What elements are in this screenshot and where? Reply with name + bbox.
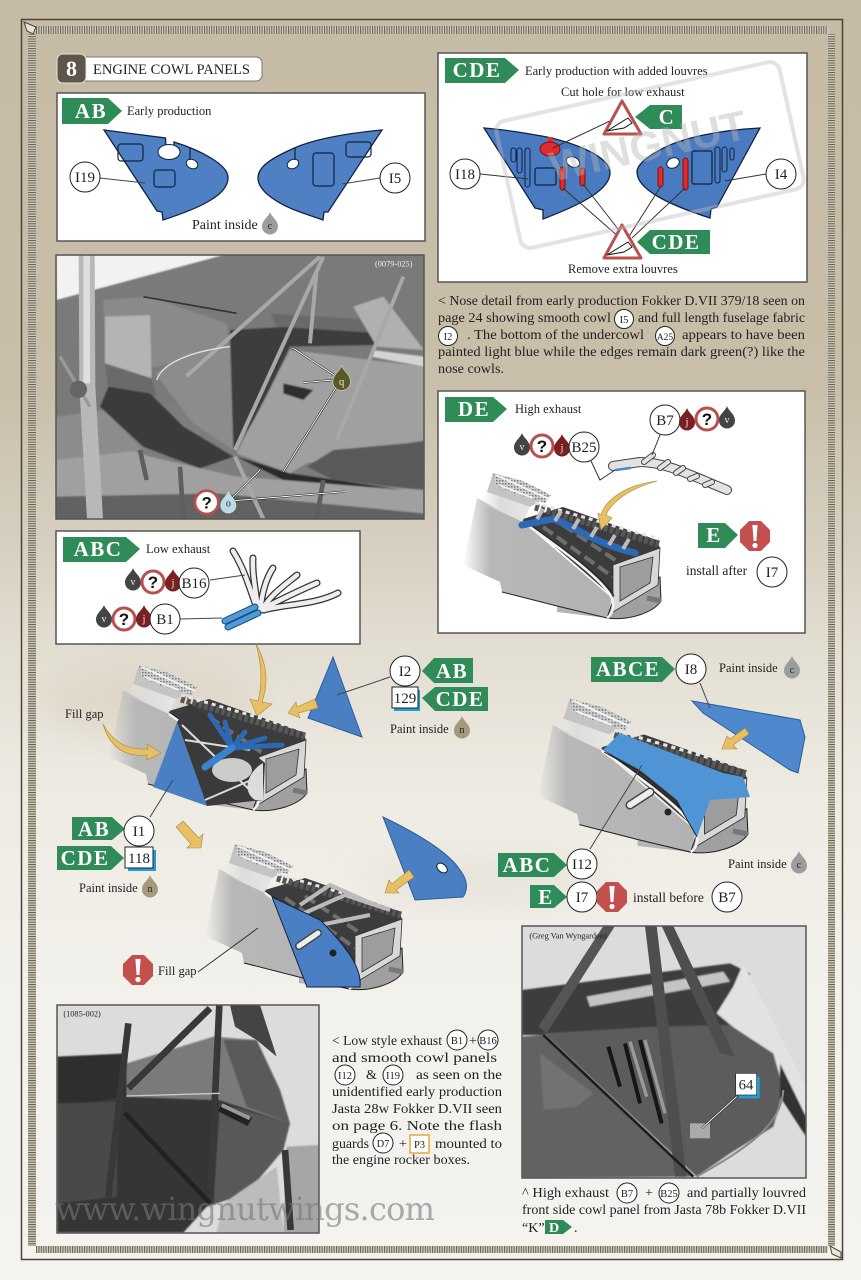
label: B7 with paints: v xyxy=(724,415,730,426)
label: I18 xyxy=(450,159,480,189)
text: high exhaust caption: + xyxy=(645,1186,653,1201)
text: low style exhaust caption: Jasta 28w Fokker D.VII seen xyxy=(332,1102,502,1117)
label: I19 xyxy=(70,162,100,192)
label: 129 part box: 129 xyxy=(394,691,416,707)
arrow: fill gap xyxy=(103,724,161,760)
label: I2: I2 xyxy=(399,664,411,680)
text: high exhaust caption: ^ High exhaust xyxy=(522,1186,609,1201)
text: low style exhaust caption: < Low style exhaust xyxy=(332,1034,442,1049)
text: low style exhaust caption: mounted to xyxy=(435,1137,502,1152)
tag: AB xyxy=(62,98,122,124)
part: front side panel xyxy=(383,817,466,900)
photo: nose detail xyxy=(56,256,424,518)
tag: AB for I1 xyxy=(72,817,125,841)
watermark stamp xyxy=(494,60,806,250)
panel: DE high exhaust xyxy=(438,391,805,633)
note: paint inside n xyxy=(390,716,470,738)
label: B25 with paints: j xyxy=(560,443,563,454)
callout: unknown and o colour xyxy=(195,470,345,514)
tag: AB left: AB xyxy=(436,659,468,683)
heading: section 8 engine cowl panels xyxy=(57,54,262,83)
text: nose detail caption: I2 xyxy=(444,332,452,343)
text: low style exhaust caption: the engine rocker boxes. xyxy=(332,1153,470,1168)
note: install after I7: I7 xyxy=(766,565,779,581)
label: B25 with paints: v xyxy=(520,442,524,453)
tag: AB for I1: AB xyxy=(78,817,110,841)
label: B7 with paints: j xyxy=(685,417,688,428)
text: low style exhaust caption: on page 6. Note the flash xyxy=(332,1119,502,1134)
text: low style exhaust caption: I12 xyxy=(338,1071,352,1082)
tag: ABC: ABC xyxy=(74,537,122,561)
tag: E: E xyxy=(706,523,722,547)
tag: E xyxy=(698,523,738,548)
watermark stamp: WINGNUT xyxy=(545,101,751,190)
note: paint inside c xyxy=(192,212,278,234)
text: nose detail caption: painted light blue while the edges remain dark green(?) like the xyxy=(438,345,805,360)
label: B16 with paints xyxy=(125,568,209,598)
note: paint inside n: n xyxy=(460,725,464,736)
text: low style exhaust caption: I19 xyxy=(386,1071,400,1082)
label: I12: I12 xyxy=(572,857,592,873)
label: B16 with paints: j xyxy=(171,578,174,589)
note: paint inside c right xyxy=(719,656,800,678)
label: I5: I5 xyxy=(389,171,401,187)
photo credit: (Greg Van Wyngarden) xyxy=(529,931,607,940)
tag: ABCE: ABCE xyxy=(596,657,660,681)
part: I2 panel xyxy=(308,657,362,737)
note: install after I7 xyxy=(686,557,787,587)
label: B16 with paints: ? xyxy=(148,573,158,592)
callout: unknown and o colour: o xyxy=(226,499,231,510)
note: install before B7: B7 xyxy=(718,890,736,906)
text: high exhaust caption: and partially louvred xyxy=(687,1186,806,1201)
part: low exhaust manifold xyxy=(225,551,338,627)
tag: ABC xyxy=(63,537,140,562)
arrow: panel to engine xyxy=(385,870,414,893)
label: 118 part box xyxy=(125,847,156,871)
text: nose detail caption: . The bottom of the undercowl xyxy=(467,328,644,343)
callout: q colour drop: q xyxy=(339,377,345,388)
label: B1 with paints: B1 xyxy=(156,612,174,628)
label: I12 xyxy=(567,849,597,879)
label: I1: I1 xyxy=(133,824,145,840)
note: paint inside c: c xyxy=(268,221,273,232)
note: paint inside c lower: Paint inside xyxy=(728,857,787,871)
note: install before B7: install before xyxy=(633,890,704,905)
note: fill gap warning: Fill gap xyxy=(158,964,197,978)
watermark: website: www.wingnutwings.com xyxy=(55,1190,435,1228)
label: B25 with paints: ? xyxy=(537,437,547,456)
tag: E for I7: E xyxy=(538,885,554,909)
text: nose detail caption: < Nose detail from early production Fokker D.VII 379/18 seen on xyxy=(438,294,805,309)
label: B7 with paints xyxy=(650,405,735,435)
icon: warning stop lower xyxy=(597,882,627,912)
text: nose detail caption: A25 xyxy=(657,333,673,343)
tag: DE xyxy=(445,397,507,422)
tag: CDE xyxy=(445,58,519,83)
label: B1 with paints xyxy=(96,604,180,634)
text: remove extra louvres: Remove extra louvres xyxy=(568,262,678,276)
arrow: install exhaust xyxy=(598,481,657,530)
text: low style exhaust caption: B1 xyxy=(451,1036,463,1047)
label: I4: I4 xyxy=(775,167,788,183)
tag: ABC for I12: ABC xyxy=(503,853,551,877)
label: I8: I8 xyxy=(685,662,697,678)
text: low style exhaust caption: as seen on the xyxy=(416,1068,502,1083)
note: install after I7: install after xyxy=(686,563,748,578)
note: fill gap warning xyxy=(123,928,258,985)
text: nose detail caption: I5 xyxy=(620,315,628,326)
label: B7 with paints: ? xyxy=(702,410,712,429)
photo credit: (1085-002) xyxy=(63,1010,101,1019)
text: early production: Early production xyxy=(127,104,212,118)
tag: DE: DE xyxy=(458,397,490,421)
photo credit: (0079-025) xyxy=(375,260,413,269)
text: low exhaust: Low exhaust xyxy=(146,542,211,556)
panel: ABC low exhaust xyxy=(56,531,360,644)
text: nose detail caption: appears to have been xyxy=(682,328,805,343)
text: nose detail caption: nose cowls. xyxy=(438,362,504,377)
text: nose detail caption: and full length fuselage fabric xyxy=(638,311,805,326)
tag: CDE right: CDE xyxy=(652,230,700,254)
label: I2 xyxy=(390,656,420,686)
label: I4 xyxy=(766,159,796,189)
text: high exhaust caption xyxy=(522,1183,806,1236)
icon: knife warning bottom xyxy=(604,225,641,258)
text: low style exhaust caption: D7 xyxy=(377,1139,389,1150)
label: B16 with paints: v xyxy=(130,577,136,588)
arrow: I8 to engine xyxy=(722,728,749,749)
tag: CDE for I1: CDE xyxy=(61,846,109,870)
illustration: engine with top cowl xyxy=(538,698,750,853)
label: B7 with paints: B7 xyxy=(656,413,674,429)
label: B1 with paints: ? xyxy=(119,610,129,629)
note: paint inside n lower xyxy=(79,875,158,898)
illustration: engine with blue exhaust xyxy=(463,473,661,619)
text: high exhaust caption: D xyxy=(549,1221,559,1236)
text: high exhaust caption: B25 xyxy=(660,1189,678,1200)
tag: C: C xyxy=(659,105,675,129)
text: low style exhaust caption: & xyxy=(366,1068,377,1083)
tag: E for I7 xyxy=(530,885,567,909)
icon: knife warning top xyxy=(604,101,641,134)
heading: section 8 engine cowl panels: 8 xyxy=(66,56,77,81)
part: I8 top cowl xyxy=(692,701,805,773)
label: I19: I19 xyxy=(75,170,95,186)
part: I4 cowl panel xyxy=(637,128,760,218)
label: I7: I7 xyxy=(576,890,589,906)
text: high exhaust caption: “K” xyxy=(522,1221,545,1236)
text: nose detail caption xyxy=(438,294,805,377)
part: I18 cowl panel xyxy=(484,128,610,219)
heading: section 8 engine cowl panels: ENGINE COWL PANELS xyxy=(93,62,250,78)
text: high exhaust caption: front side cowl panel from Jasta 78b Fokker D.VII xyxy=(522,1203,806,1218)
text: cut hole for low exhaust: Cut hole for low exhaust xyxy=(561,85,685,99)
part: I19 cowl panel xyxy=(104,130,228,220)
part: I5 cowl panel xyxy=(258,130,382,220)
note: paint inside n: Paint inside xyxy=(390,722,449,736)
callout: q colour drop xyxy=(283,348,350,472)
note: fill gap: Fill gap xyxy=(65,707,104,721)
text: low style exhaust caption: + xyxy=(399,1137,407,1152)
text: low style exhaust caption: guards xyxy=(332,1137,369,1152)
text: low style exhaust caption: B16 xyxy=(479,1036,497,1047)
note: paint inside c right: Paint inside xyxy=(719,661,778,675)
text: early production with added louvres: Early production with added louvres xyxy=(525,64,708,78)
label: 118 part box: 118 xyxy=(128,851,150,867)
text: low style exhaust caption: P3 xyxy=(414,1140,425,1151)
label: B1 with paints: v xyxy=(102,614,106,625)
note: paint inside c lower xyxy=(728,851,807,874)
text: high exhaust caption: . xyxy=(574,1221,578,1236)
label: I18: I18 xyxy=(455,167,475,183)
tag: CDE right xyxy=(637,230,710,254)
label: I1 xyxy=(124,816,154,846)
icon: warning stop xyxy=(740,521,770,551)
label: I8 xyxy=(676,654,706,684)
text: high exhaust: High exhaust xyxy=(515,402,582,416)
callout: unknown and o colour: ? xyxy=(202,493,212,512)
photo: low style exhaust xyxy=(58,1006,318,1232)
tag: C xyxy=(635,105,682,129)
label: 64 part box: 64 xyxy=(739,1077,754,1093)
note: paint inside c lower: c xyxy=(797,860,802,871)
note: install before B7 xyxy=(633,882,742,912)
text: high exhaust caption: B7 xyxy=(621,1189,633,1200)
label: 64 part box xyxy=(702,1073,760,1128)
label: I7 xyxy=(567,882,597,912)
tag: CDE left: CDE xyxy=(436,687,484,711)
tag: AB: AB xyxy=(75,99,107,123)
tag: AB left xyxy=(422,658,473,683)
label: B25 with paints xyxy=(514,432,599,462)
note: paint inside n lower: n xyxy=(148,884,152,895)
label: B16 with paints: B16 xyxy=(181,576,207,592)
text: low style exhaust caption: unidentified early production xyxy=(332,1085,502,1100)
note: paint inside c: Paint inside xyxy=(192,218,258,233)
label: B1 with paints: j xyxy=(142,614,145,625)
arrow: I2 to engine xyxy=(288,699,318,718)
illustration: engine with I1 and low exhaust xyxy=(109,665,307,811)
text: low style exhaust caption xyxy=(332,1030,502,1168)
panel: CDE early production with added louvres xyxy=(438,53,807,282)
photo: high exhaust front cowl xyxy=(522,926,806,1178)
note: paint inside c right: c xyxy=(790,665,795,676)
panel: AB early production xyxy=(57,93,425,241)
label: 129 part box xyxy=(392,687,420,711)
text: low style exhaust caption: + xyxy=(469,1034,477,1049)
arrow: down to next step xyxy=(176,821,203,848)
illustration: engine with front side panel xyxy=(205,844,403,990)
part: high exhaust manifold xyxy=(613,455,727,490)
text: low style exhaust caption: and smooth cowl panels xyxy=(332,1051,497,1066)
text: nose detail caption: page 24 showing smooth cowl xyxy=(438,311,611,326)
label: I5 xyxy=(380,163,410,193)
arrow: from low exhaust to engine xyxy=(250,644,272,716)
label: B25 with paints: B25 xyxy=(571,440,597,456)
tag: CDE: CDE xyxy=(453,58,501,82)
note: paint inside n lower: Paint inside xyxy=(79,881,138,895)
